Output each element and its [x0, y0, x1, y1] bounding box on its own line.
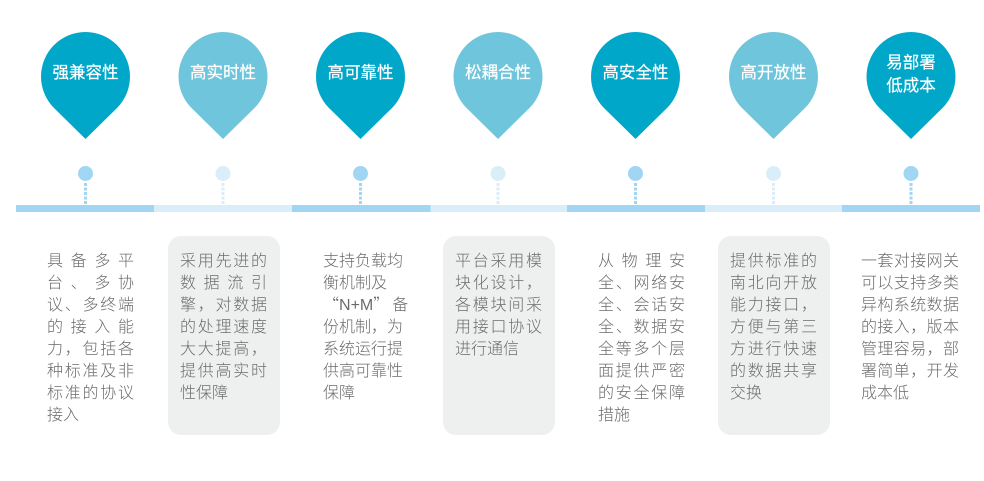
timeline bar	[16, 205, 980, 212]
text: 高实时性 description: 提供高实时	[180, 363, 267, 380]
text: 高可靠性 description: 系统运行提	[323, 341, 403, 358]
pin: 强兼容性: 强兼容性	[52, 63, 118, 82]
text: 高实时性 description: 大大提高，	[180, 341, 267, 358]
text: 易部署低成本 description: 的接入，版本	[861, 319, 959, 336]
text: 高安全性 description: 全等多个层	[598, 341, 685, 358]
text: 高实时性 description: 的处理速度	[180, 319, 267, 336]
node 6	[766, 166, 781, 204]
text: 强兼容性 description: 台、多协	[47, 275, 134, 292]
text: 高安全性 description: 的安全保障	[598, 385, 685, 402]
node 5	[628, 166, 643, 204]
text: 松耦合性 description: 块化设计，	[455, 275, 542, 292]
text: 高安全性 description: 全、数据安	[598, 319, 685, 336]
pin: 易部署低成本	[866, 32, 956, 139]
text: 高可靠性 description: 保障	[323, 385, 355, 402]
text: 松耦合性 description: 用接口协议	[455, 319, 542, 336]
text: 高开放性 description: 南北向开放	[730, 275, 817, 292]
text: 高可靠性 description: 供高可靠性	[323, 363, 403, 380]
text: 易部署低成本 description: 署简单，开发	[861, 363, 959, 380]
text: 高可靠性 description: 衡机制及	[323, 275, 387, 292]
text: 高开放性 description: 能力接口，	[730, 297, 817, 314]
text: 高安全性 description: 面提供严密	[598, 363, 685, 380]
node 2	[216, 166, 230, 204]
text: 高实时性 description	[180, 252, 267, 402]
text: 易部署低成本 description: 异构系统数据	[861, 297, 959, 314]
card background: 松耦合性	[443, 236, 555, 434]
text: 高安全性 description: 全、会话安	[598, 297, 685, 314]
pin: 易部署低成本: 易部署	[886, 53, 936, 72]
text: 高安全性 description: 措施	[598, 407, 630, 424]
pin: 高安全性	[591, 32, 680, 139]
text: 高实时性 description: 性保障	[180, 385, 228, 402]
text: 强兼容性 description: 具备多平	[47, 253, 134, 270]
text: 高实时性 description: 采用先进的	[180, 253, 267, 270]
text: 强兼容性 description	[47, 252, 134, 424]
text: 松耦合性 description	[455, 252, 542, 358]
text: 高安全性 description: 从物理安	[598, 253, 685, 270]
text: 高开放性 description: 方进行快速	[730, 341, 817, 358]
text: 易部署低成本 description: 一套对接网关	[861, 253, 959, 270]
pin: 高实时性: 高实时性	[190, 63, 256, 82]
text: 高开放性 description	[730, 252, 817, 402]
pin: 高开放性	[729, 32, 818, 139]
text: 高开放性 description: 提供标准的	[730, 253, 817, 270]
text: 高可靠性 description: 支持负载均	[323, 253, 403, 270]
text: 高实时性 description: 数据流引	[180, 275, 267, 292]
text: 易部署低成本 description	[861, 252, 959, 402]
node 7	[904, 166, 918, 204]
pin: 易部署低成本: 低成本	[886, 76, 936, 95]
pin: 高可靠性	[316, 32, 405, 139]
text: 易部署低成本 description: 成本低	[861, 385, 909, 402]
text: 强兼容性 description: 力，包括各	[47, 341, 134, 358]
text: 松耦合性 description: 进行通信	[455, 341, 519, 358]
pin: 强兼容性	[41, 32, 130, 139]
pin: 高安全性: 高安全性	[602, 63, 668, 82]
text: 高开放性 description: 的数据共享	[730, 363, 817, 380]
text: 高实时性 description: 擎，对数据	[180, 297, 267, 314]
text: 高可靠性 description: “N+M”备	[323, 291, 408, 315]
text: 松耦合性 description: 平台采用模	[455, 253, 542, 270]
text: 强兼容性 description: 种标准及非	[47, 363, 134, 380]
card background: 高开放性	[718, 236, 830, 434]
card background: 高实时性	[168, 236, 280, 434]
pin: 高实时性	[178, 32, 268, 139]
pin: 高开放性: 高开放性	[740, 63, 806, 82]
node 3	[353, 166, 368, 204]
text: 高开放性 description: 交换	[730, 385, 762, 402]
text: 松耦合性 description: 各模块间采	[455, 297, 542, 314]
text: 易部署低成本 description: 可以支持多类	[861, 275, 959, 292]
text: 强兼容性 description: 接入	[47, 407, 79, 424]
text: 高可靠性 description	[323, 252, 408, 402]
pin: 松耦合性: 松耦合性	[465, 63, 531, 82]
text: 高开放性 description: 方便与第三	[730, 319, 817, 336]
pin: 高可靠性: 高可靠性	[328, 63, 394, 82]
text: 高可靠性 description: 份机制，为	[323, 319, 403, 336]
text: 强兼容性 description: 的接入能	[47, 319, 134, 336]
text: 高安全性 description	[598, 252, 685, 424]
node 4	[490, 166, 506, 204]
pin: 松耦合性	[454, 32, 542, 139]
text: 高安全性 description: 全、网络安	[598, 275, 685, 292]
text: 易部署低成本 description: 管理容易，部	[861, 341, 959, 358]
text: 强兼容性 description: 标准的协议	[47, 385, 134, 402]
text: 强兼容性 description: 议、多终端	[47, 297, 134, 314]
node 1	[78, 166, 93, 204]
